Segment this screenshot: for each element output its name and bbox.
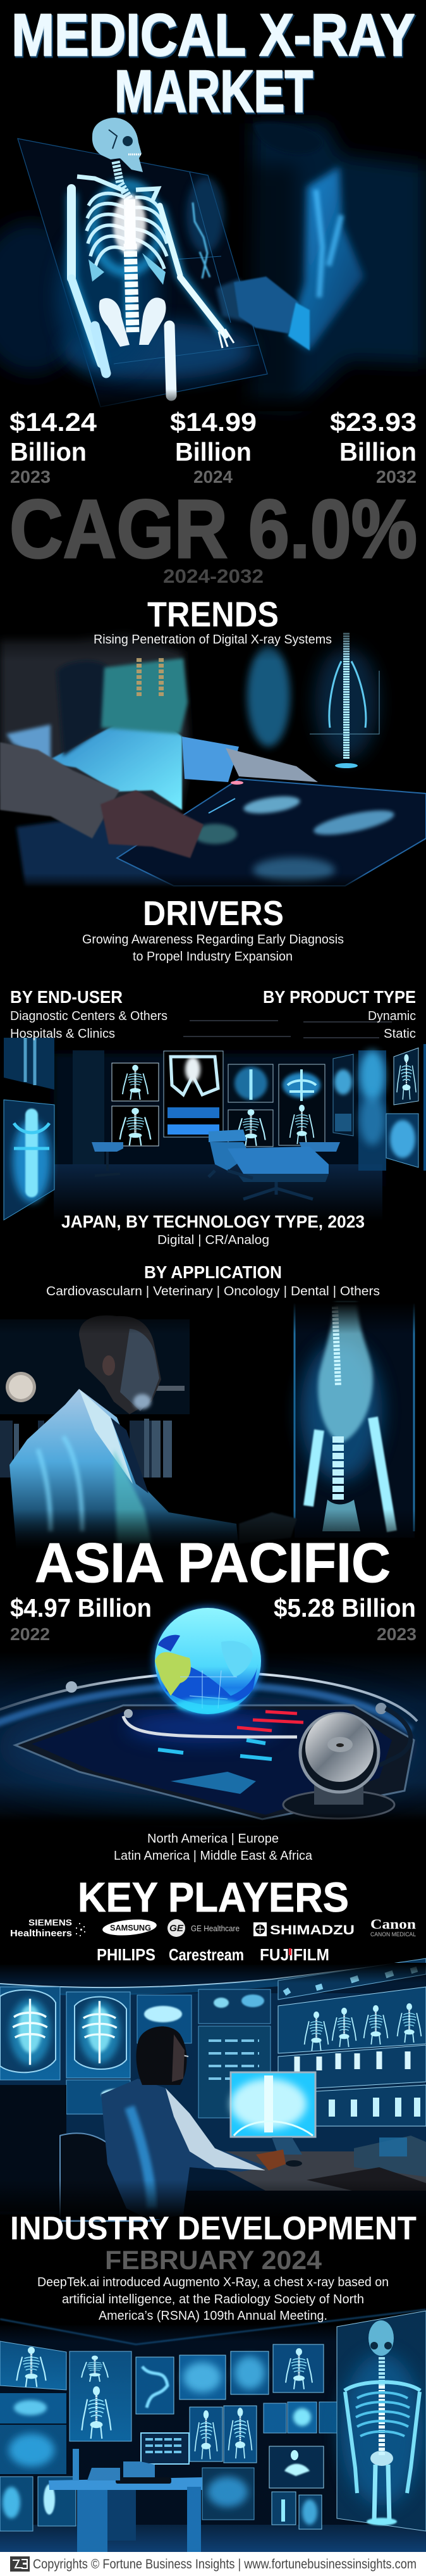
logo: canon medical — [370, 1916, 416, 1938]
market value 2023: Billion — [10, 437, 87, 466]
market value 2023 — [9, 408, 97, 487]
asia pacific 2022 value: $4.97 Billion — [10, 1593, 152, 1622]
industry development text: America’s (RSNA) 109th Annual Meeting. — [99, 2309, 327, 2323]
logo: siemens healthineers: SIEMENS — [28, 1917, 72, 1927]
trends illustration: hands on tablet — [0, 617, 426, 891]
control room illustration — [0, 1958, 426, 2221]
by application — [46, 1262, 380, 1298]
title — [11, 1, 416, 126]
by end-user: Hospitals & Clinics — [10, 1027, 115, 1041]
logo: siemens healthineers: Healthineers — [10, 1928, 72, 1939]
japan by technology type — [61, 1212, 365, 1247]
title: MARKET — [116, 59, 314, 126]
doctor head — [79, 1316, 161, 1414]
logo: philips: PHILIPS — [97, 1945, 155, 1964]
drivers heading and text: DRIVERS — [143, 893, 284, 933]
back wall panels — [112, 1051, 325, 1147]
room illustration: x-ray panels and beds — [4, 1021, 426, 1221]
asia pacific 2022 value: 2022 — [10, 1624, 50, 1644]
logo: fujifilm: FUJIFILM — [260, 1945, 329, 1964]
trends heading and text: Rising Penetration of Digital X-ray Systems — [94, 633, 332, 647]
industry development text: DeepTek.ai introduced Augmento X-Ray, a chest x-ray based on — [37, 2275, 389, 2289]
background x-ray panels — [247, 633, 379, 768]
logo: canon medical: Canon — [370, 1916, 416, 1932]
doctor arm and hand — [216, 166, 364, 351]
market value 2032: $23.93 — [330, 408, 417, 437]
doctor viewing x-ray illustration — [0, 1302, 426, 1550]
other regions list: Latin America | Middle East & Africa — [114, 1849, 313, 1863]
logo: shimadzu — [253, 1922, 355, 1938]
desk and equipment — [0, 2085, 426, 2216]
industry development text: artificial intelligence, at the Radiology Society of North — [62, 2293, 364, 2306]
industry development text — [37, 2275, 389, 2323]
glass x-ray panel — [18, 139, 267, 407]
x-ray viewing panel — [295, 1304, 415, 1538]
by product type: BY PRODUCT TYPE — [263, 987, 416, 1007]
by end-user: Diagnostic Centers & Others — [10, 1009, 167, 1023]
market value 2024: 2024 — [193, 467, 233, 487]
logo: samsung — [102, 1917, 157, 1938]
large skeleton panel — [337, 2311, 426, 2531]
market value 2024: $14.99 — [170, 408, 257, 437]
logo: shimadzu: SHIMADZU — [270, 1923, 355, 1938]
tablet — [15, 1705, 414, 1819]
logo: siemens healthineers — [10, 1917, 85, 1939]
by application: BY APPLICATION — [144, 1262, 282, 1282]
hero illustration: doctor examining skeleton x-ray — [0, 118, 426, 411]
other regions list: North America | Europe — [147, 1832, 279, 1846]
market value 2023: 2023 — [10, 467, 51, 487]
icon: fortune business insights logo — [10, 2556, 30, 2572]
market value 2024 — [170, 408, 257, 487]
bright computer monitor — [231, 2072, 315, 2155]
market value 2032 — [330, 408, 417, 487]
drivers heading and text — [82, 893, 344, 964]
industry development heading: FEBRUARY 2024 — [105, 2245, 322, 2275]
japan by technology type: Digital | CR/Analog — [157, 1233, 269, 1247]
market value 2032: Billion — [339, 437, 417, 466]
tablet — [117, 779, 426, 886]
logo: ge healthcare: GE Healthcare — [191, 1924, 240, 1933]
market value 2032: 2032 — [376, 467, 417, 487]
market value 2023: $14.24 — [9, 408, 97, 437]
asia pacific 2023 value — [274, 1593, 417, 1644]
bookshelf and clock — [0, 1372, 185, 1478]
desk and workstation — [49, 2433, 202, 2552]
doctor coat — [9, 1389, 297, 1550]
market value 2024: Billion — [175, 437, 252, 466]
drivers heading and text: to Propel Industry Expansion — [133, 950, 293, 964]
asia pacific 2023 value: 2023 — [377, 1624, 417, 1644]
title: MARKET — [114, 58, 313, 124]
stethoscope chestpiece — [123, 1708, 411, 1819]
logo: canon medical: CANON MEDICAL — [370, 1931, 416, 1938]
skeleton — [71, 118, 234, 395]
trends heading and text — [94, 594, 332, 647]
by application: Cardiovascularn | Veterinary | Oncology | Dental | Others — [46, 1285, 380, 1298]
industry development heading: INDUSTRY DEVELOPMENT — [10, 2210, 417, 2247]
right wall panels — [333, 1044, 426, 1171]
other regions list — [114, 1832, 313, 1863]
footer — [0, 2552, 426, 2576]
asia pacific heading: ASIA PACIFIC — [35, 1531, 391, 1594]
globe and stethoscope illustration — [0, 1607, 426, 1826]
trends heading and text: TRENDS — [147, 594, 279, 634]
wall panels — [0, 2341, 337, 2531]
beds — [92, 1129, 340, 1199]
left wall panels — [4, 1038, 104, 1220]
by end-user — [10, 987, 167, 1041]
logo: ge healthcare: GE — [169, 1923, 184, 1934]
seated radiologist — [60, 2026, 286, 2221]
industry development heading — [10, 2210, 417, 2275]
logo: carestream: Carestream — [169, 1945, 244, 1964]
title: MARKET — [115, 58, 313, 125]
by end-user: BY END-USER — [10, 987, 123, 1007]
japan by technology type: JAPAN, BY TECHNOLOGY TYPE, 2023 — [61, 1212, 365, 1231]
logo: ge healthcare — [167, 1919, 240, 1937]
wall monitors — [0, 1958, 426, 2126]
stethoscope ring — [0, 1672, 417, 1731]
lower x-ray room illustration — [0, 2310, 426, 2552]
by product type: Static — [384, 1027, 416, 1041]
globe — [154, 1607, 262, 1715]
key players heading: KEY PLAYERS — [78, 1874, 349, 1920]
by product type — [263, 987, 416, 1041]
drivers heading and text: Growing Awareness Regarding Early Diagnosis — [82, 933, 344, 947]
key player logos — [10, 1916, 416, 1964]
asia pacific 2022 value — [10, 1593, 152, 1644]
asia pacific 2023 value: $5.28 Billion — [274, 1593, 416, 1622]
cagr: 2024-2032 — [163, 565, 264, 587]
logo: samsung: SAMSUNG — [110, 1923, 151, 1932]
by product type: Dynamic — [368, 1009, 416, 1023]
